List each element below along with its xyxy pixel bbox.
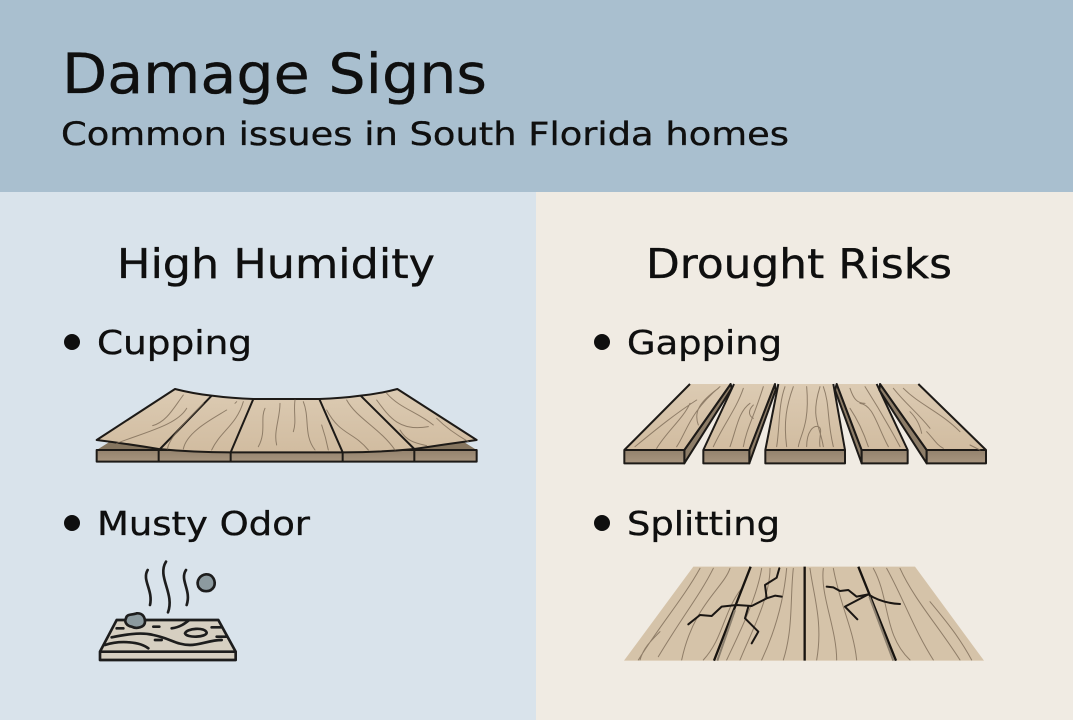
illustration: cupped floorboards	[97, 389, 477, 462]
mould patch	[125, 613, 145, 628]
board seams	[714, 567, 896, 661]
board	[100, 620, 236, 660]
odor wisps	[146, 562, 188, 612]
bullet: Musty Odor: Musty Odor	[97, 504, 310, 543]
illustration: split floorboards	[624, 567, 984, 661]
plank 3	[765, 384, 845, 463]
heading: High Humidity: High Humidity	[117, 240, 435, 288]
panel: left background	[0, 192, 536, 720]
bullet: Cupping: Cupping	[97, 323, 252, 362]
mould spore	[198, 574, 215, 591]
plank 5	[879, 384, 986, 463]
heading: Drought Risks: Drought Risks	[646, 240, 952, 288]
illustration: gapped floorboards	[624, 384, 986, 463]
plank 1	[624, 384, 732, 463]
header banner	[0, 0, 1073, 192]
cracks	[688, 568, 900, 643]
icon: musty odor mouldy board	[100, 562, 236, 660]
bullet: Gapping: Gapping	[627, 323, 782, 362]
plank 2	[703, 384, 776, 463]
panel: right background	[536, 192, 1073, 720]
title: Damage Signs	[62, 42, 487, 106]
plank 4	[835, 384, 908, 463]
subtitle: Common issues in South Florida homes	[61, 115, 789, 153]
bullet: Splitting: Splitting	[627, 504, 780, 543]
